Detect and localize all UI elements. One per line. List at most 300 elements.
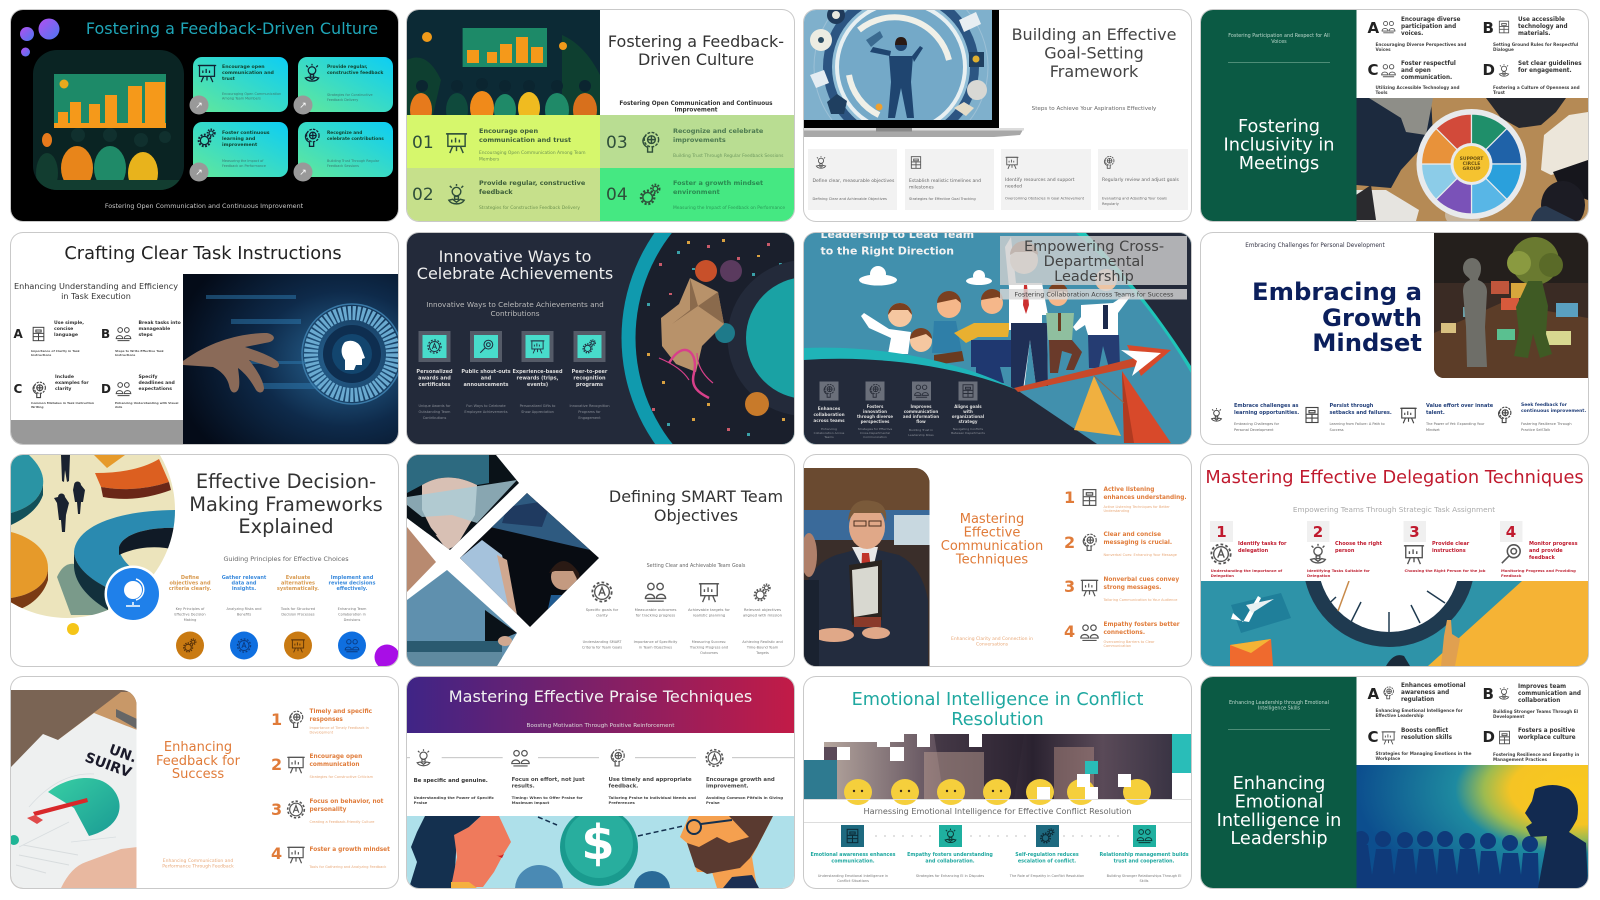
step 3 bbox=[1064, 577, 1179, 602]
box 3: Identify resources and support bbox=[1004, 177, 1074, 183]
column 2: Cross-Departmental bbox=[859, 430, 890, 434]
step 3: strong messages. bbox=[1103, 585, 1161, 591]
item A: Encouraging Diverse Perspectives and bbox=[1375, 42, 1466, 47]
column 4: Time-Bound Team bbox=[746, 646, 779, 650]
subtitle: Enhancing Communication and bbox=[162, 858, 233, 864]
header band bbox=[407, 677, 794, 733]
step 2: Choose the right bbox=[1334, 541, 1382, 547]
column 4: Relationship management builds bbox=[1099, 852, 1188, 858]
block 02: Provide regular, constructive bbox=[479, 179, 586, 187]
item C: examples for bbox=[54, 380, 89, 386]
step 4: and provide bbox=[1528, 548, 1563, 554]
item 1: Personal Development bbox=[1234, 428, 1274, 432]
subtitle: Setting Clear and Achievable Team Goals bbox=[647, 563, 746, 569]
column 4: Skills bbox=[1139, 879, 1148, 883]
column 1: certificates bbox=[419, 382, 450, 388]
gray title panel: Departmental bbox=[1043, 254, 1144, 270]
item A: Enhances emotional bbox=[1400, 683, 1465, 689]
item 2: Persist through bbox=[1329, 402, 1373, 408]
green side panel: Enhancing bbox=[1232, 774, 1325, 794]
panel: Enhancing Emotional Intelligence in Leadership bbox=[1200, 677, 1588, 888]
column 4: Aligns goals bbox=[954, 404, 982, 408]
card: foster continuous learning: Foster continuous bbox=[222, 130, 269, 136]
block 03: Recognize and celebrate bbox=[673, 127, 764, 135]
block 02: Strategies for Constructive Feedback Delivery bbox=[479, 205, 580, 211]
block 01: 01 bbox=[412, 133, 434, 153]
step 3: 3 bbox=[1064, 577, 1075, 596]
item C: C bbox=[13, 382, 22, 396]
card: encourage open communication: Encouraging Open Communication bbox=[222, 92, 281, 96]
step 2: Delegation bbox=[1306, 573, 1330, 578]
panel: Fostering a Feedback-Driven Culture (dark) bbox=[10, 10, 398, 221]
step 3: Creating a Feedback-Friendly Culture bbox=[309, 820, 374, 824]
title: Mastering Effective Delegation Techniques bbox=[1205, 467, 1583, 488]
column 4: Programs for bbox=[578, 410, 601, 414]
title: Mindset bbox=[1312, 328, 1422, 356]
step 4: Empathy fosters better bbox=[1103, 622, 1179, 628]
picture: statue and tree figure bbox=[1434, 232, 1588, 378]
header band: Boosting Motivation Through Positive Reinforcement bbox=[527, 723, 675, 729]
step 2: communication bbox=[309, 762, 359, 768]
item D bbox=[100, 374, 178, 408]
item 3: Tailoring Praise to Individual Needs and bbox=[608, 795, 696, 800]
green side panel: Intelligence in bbox=[1216, 811, 1341, 831]
column 1: across teams bbox=[813, 418, 845, 422]
title: Innovative Ways to bbox=[439, 246, 591, 266]
item D: Set clear guidelines bbox=[1518, 61, 1582, 67]
picture: abstract shapes with walking figures bbox=[11, 455, 175, 618]
item B: materials. bbox=[1518, 31, 1550, 37]
step 2: 2 bbox=[1312, 523, 1323, 541]
step 4: connections. bbox=[1103, 630, 1145, 636]
box 4: Regularly bbox=[1102, 202, 1119, 206]
panel: Fostering a Feedback-Driven Culture (numbered) bbox=[407, 10, 794, 221]
item A: A bbox=[13, 326, 23, 340]
card: recognize contributions: celebrate contributions bbox=[326, 136, 384, 142]
step 2: messaging is crucial. bbox=[1103, 540, 1172, 546]
dotted connectors bbox=[875, 835, 1118, 837]
column 1: Specific goals for bbox=[586, 607, 619, 612]
column 3 bbox=[1008, 825, 1084, 878]
column 1: Teams bbox=[823, 434, 834, 438]
timeline connectors bbox=[407, 757, 794, 758]
item C: Foster respectful bbox=[1400, 61, 1455, 67]
step 4: Communication bbox=[1103, 644, 1131, 648]
block 01 bbox=[407, 115, 600, 168]
item B: Development bbox=[1492, 714, 1524, 719]
green side panel: Fostering Participation and Respect for All bbox=[1228, 33, 1329, 39]
subtitle: Empowering Teams Through Strategic Task Assignment bbox=[1292, 505, 1495, 514]
column 3: Improves bbox=[910, 404, 932, 408]
step 1: Development bbox=[309, 730, 333, 734]
item 1 bbox=[414, 749, 495, 805]
item B: collaboration bbox=[1518, 698, 1560, 704]
column 1: Enhances bbox=[817, 406, 840, 410]
item C: communication. bbox=[1400, 75, 1452, 81]
item A: A bbox=[1367, 19, 1379, 37]
column 1: criteria clearly. bbox=[168, 586, 211, 592]
column 2: Empathy fosters understanding bbox=[907, 852, 993, 858]
step 4: Monitoring Progress and Providing bbox=[1500, 568, 1576, 573]
item A: Voices bbox=[1375, 47, 1391, 52]
column 1: collaboration bbox=[813, 412, 844, 416]
subtitle: Fostering Open Communication and Continuous bbox=[619, 101, 773, 107]
column 3 bbox=[276, 575, 319, 660]
step 3: Focus on behavior, not bbox=[309, 799, 383, 805]
box 1: Defining Clear and Achievable Objectives bbox=[812, 197, 887, 201]
step 4 bbox=[1064, 622, 1179, 648]
item B: Instructions bbox=[114, 352, 135, 356]
card: encourage open communication: Among Team Members bbox=[222, 96, 261, 100]
title: Mastering bbox=[959, 512, 1024, 527]
column 4: Navigating Conflicts bbox=[952, 426, 983, 430]
green side panel: Intelligence Skills bbox=[1257, 706, 1300, 712]
title: Resolution bbox=[951, 710, 1043, 730]
column 1: Personalized bbox=[416, 368, 453, 374]
item 3: The Power of Yet: Expanding Your bbox=[1424, 422, 1484, 426]
picture: two people and dollar coin: $ bbox=[581, 815, 615, 871]
card: provide regular feedback bbox=[293, 57, 392, 114]
card: recognize contributions: Building Trust Through Regular bbox=[326, 159, 379, 163]
item B: Break tasks into bbox=[138, 320, 180, 326]
column 4: with bbox=[963, 408, 973, 414]
step 2: 2 bbox=[270, 755, 282, 774]
panel: Mastering Effective Delegation Techniques bbox=[1200, 455, 1588, 666]
column 1: Collaboration Across bbox=[813, 430, 844, 434]
item C: Strategies for Managing Emotions in the bbox=[1375, 751, 1471, 756]
column 2: innovation bbox=[862, 408, 887, 414]
card: foster continuous learning: learning and bbox=[222, 136, 255, 142]
card: provide regular feedback: Strategies for Constructive bbox=[326, 93, 372, 97]
column 2: for tracking progress bbox=[636, 612, 675, 618]
card: encourage open communication: trust bbox=[222, 76, 235, 82]
item 1: Understanding the Power of Specific bbox=[414, 795, 495, 800]
step 3 bbox=[1403, 521, 1485, 573]
item 4: Encourage growth and bbox=[706, 777, 775, 783]
step 2 bbox=[1064, 532, 1176, 557]
item C: C bbox=[1367, 728, 1378, 746]
box 1: Define clear, measurable objectives bbox=[812, 178, 894, 184]
column 4: aligned with mission bbox=[743, 612, 783, 618]
item B: Building Stronger Teams Through EI bbox=[1492, 709, 1578, 714]
item D: Fostering a Culture of Openness and bbox=[1492, 85, 1579, 90]
step 1 bbox=[1210, 521, 1287, 578]
column 2 bbox=[221, 575, 266, 660]
banner subtitle: Harnessing Emotional Intelligence for Effective Conflict Resolution bbox=[863, 806, 1131, 816]
subtitle: Embracing Challenges for Personal Development bbox=[1245, 242, 1385, 248]
column 4: Innovative Recognition bbox=[569, 404, 610, 408]
item D: Fosters a positive bbox=[1518, 728, 1575, 734]
step 1: Understanding the Importance of bbox=[1210, 568, 1282, 573]
panel: Crafting Clear Task Instructions bbox=[10, 232, 398, 444]
box 2: Strategies for Effective Goal Tracking bbox=[908, 197, 975, 201]
step 1: responses bbox=[309, 717, 343, 723]
title: Feedback for bbox=[156, 754, 240, 769]
block 02: 02 bbox=[412, 185, 434, 205]
card: recognize contributions: Recognize and bbox=[326, 130, 362, 136]
column 4: strategy bbox=[958, 418, 977, 424]
picture: survey sheet and pencil bbox=[8, 690, 138, 888]
item D: Aids bbox=[114, 404, 122, 408]
column 2: and collaboration. bbox=[925, 858, 974, 864]
item D: deadlines and bbox=[138, 380, 174, 386]
item 2 bbox=[1306, 402, 1391, 432]
item 2 bbox=[512, 750, 585, 805]
picture: diamond photo mosaic bbox=[407, 455, 599, 666]
item B bbox=[1482, 17, 1578, 52]
subtitle: in Task Execution bbox=[61, 290, 130, 300]
column 3: Show Appreciation bbox=[521, 410, 554, 414]
title: Crafting Clear Task Instructions bbox=[64, 242, 341, 264]
box 2: Establish realistic timelines and bbox=[908, 178, 981, 184]
green side panel bbox=[1200, 10, 1356, 221]
gray title panel: Leadership bbox=[1054, 268, 1133, 284]
item 3: Preferences bbox=[608, 800, 636, 805]
column 2: Fosters bbox=[866, 404, 883, 408]
item 3: talent. bbox=[1426, 410, 1444, 416]
subtitle: Contributions bbox=[490, 308, 540, 318]
picture: team riding an arrow: to the Right Direction bbox=[820, 244, 953, 257]
column 1: Key Principles of bbox=[175, 607, 205, 611]
green side panel: Fostering bbox=[1237, 117, 1320, 137]
block 02: feedback bbox=[479, 188, 513, 196]
step 3 bbox=[270, 799, 383, 824]
item D: expectations bbox=[138, 386, 172, 392]
item B bbox=[1482, 684, 1580, 719]
panel: Mastering Effective Communication Techniques bbox=[804, 455, 1190, 666]
column 2: Benefits bbox=[236, 612, 251, 616]
item B: steps bbox=[138, 332, 152, 338]
block 04 bbox=[600, 168, 794, 221]
step 1 bbox=[1064, 487, 1186, 513]
item C: resolution skills bbox=[1400, 735, 1452, 741]
card: provide regular feedback: Feedback Delivery bbox=[326, 98, 358, 102]
card: recognize contributions bbox=[293, 122, 392, 182]
column 4 bbox=[951, 381, 985, 434]
subtitle: Steps to Achieve Your Aspirations Effectively bbox=[1031, 106, 1157, 112]
block 03 bbox=[600, 115, 794, 168]
box 2 bbox=[904, 149, 994, 210]
column 3: flow bbox=[916, 418, 926, 424]
title: Success bbox=[171, 767, 224, 782]
step 4: feedback bbox=[1528, 555, 1555, 561]
item B: communication and bbox=[1518, 691, 1580, 697]
column 2: Strategies for Enhancing EI in Disputes bbox=[915, 874, 984, 878]
step 2: 2 bbox=[1064, 533, 1075, 552]
title: Fostering a Feedback- bbox=[608, 32, 784, 51]
column 4: Between Departments bbox=[951, 430, 985, 434]
panel: Building an Effective Goal-Setting Framework bbox=[804, 10, 1190, 221]
item 4: Praise bbox=[706, 800, 720, 805]
column 3 bbox=[512, 330, 563, 414]
subtitle: Conversations bbox=[975, 642, 1008, 648]
panel: Embracing a Growth Mindset bbox=[1200, 232, 1588, 444]
item A: Effective Leadership bbox=[1375, 713, 1423, 718]
item 4: improvement. bbox=[706, 784, 749, 790]
column 4: programs bbox=[576, 382, 603, 388]
column 1: communication. bbox=[831, 858, 874, 864]
item B: B bbox=[100, 326, 110, 340]
item 3 bbox=[1400, 402, 1493, 432]
item C: and open bbox=[1400, 68, 1430, 74]
item 1: learning opportunities. bbox=[1234, 410, 1299, 416]
column 2: Measurable outcomes bbox=[635, 607, 676, 612]
column 2 bbox=[634, 583, 677, 650]
subtitle: Fostering Open Communication and Continuous Improvement bbox=[104, 202, 303, 210]
item 1: Praise bbox=[414, 800, 428, 805]
item D: D bbox=[1482, 728, 1494, 746]
step 2 bbox=[1306, 521, 1382, 578]
column 4 bbox=[1099, 825, 1188, 883]
column 1 bbox=[168, 575, 211, 660]
item 3: Mindset bbox=[1426, 428, 1440, 432]
item 2: Timing: When to Offer Praise for bbox=[512, 795, 583, 800]
item D: workplace culture bbox=[1518, 735, 1575, 741]
item B: B bbox=[1482, 19, 1493, 37]
step 2: Identifying Tasks Suitable for bbox=[1306, 568, 1370, 573]
column 2: Public shout-outs bbox=[461, 368, 511, 374]
column 4 bbox=[569, 330, 610, 420]
item 1: Embrace challenges as bbox=[1234, 402, 1298, 408]
column 4 bbox=[328, 575, 375, 660]
step 4 bbox=[1500, 521, 1577, 578]
item A: voices. bbox=[1400, 31, 1423, 37]
panel: Mastering Effective Praise Techniques bbox=[407, 677, 794, 888]
title: Communication bbox=[940, 539, 1043, 554]
step 2 bbox=[270, 754, 373, 779]
column 4: effectively. bbox=[336, 586, 367, 592]
item D: D bbox=[1482, 61, 1494, 79]
item A: Enhancing Emotional Intelligence for bbox=[1375, 708, 1463, 713]
item C: C bbox=[1367, 61, 1378, 79]
column 1: clarity bbox=[596, 612, 609, 618]
step 3: 3 bbox=[270, 800, 282, 819]
panel: Effective Decision-Making Frameworks Explained bbox=[10, 455, 398, 666]
step 4: Feedback bbox=[1500, 573, 1521, 578]
picture: meeting circle with wheel bbox=[1356, 98, 1588, 229]
step 1: 1 bbox=[1216, 523, 1226, 541]
gray title panel: Empowering Cross- bbox=[1023, 238, 1164, 254]
green side panel: Enhancing Leadership through Emotional bbox=[1228, 700, 1328, 706]
picture: gift bag and confetti bbox=[622, 154, 990, 522]
title: Framework bbox=[1049, 62, 1139, 81]
column 3: rewards (trips, bbox=[517, 375, 559, 381]
step 1: Identify tasks for bbox=[1238, 541, 1287, 547]
panel: Empowering Cross-Departmental Leadership bbox=[804, 232, 1190, 444]
picture: hand touching AI dial bbox=[182, 274, 402, 444]
item D bbox=[1482, 728, 1579, 762]
column 3: Achievable targets for bbox=[688, 607, 730, 612]
item A: Encourage diverse bbox=[1400, 17, 1460, 23]
item C: Include bbox=[54, 374, 73, 380]
card: encourage open communication: communication and bbox=[222, 70, 273, 76]
item A: concise bbox=[54, 326, 73, 332]
column 4: review decisions bbox=[328, 580, 375, 586]
box 3: Overcoming Obstacles in Goal Achievement bbox=[1004, 196, 1084, 200]
step 3: Tailoring Communication to Your Audience bbox=[1102, 598, 1177, 602]
column 1: awards and bbox=[418, 375, 451, 381]
picture: audience watching a bar chart bbox=[32, 50, 184, 194]
column 3: Tools for Structured bbox=[279, 607, 315, 611]
subtitle panel: Fostering Collaboration Across Teams for Success bbox=[1014, 290, 1174, 298]
step 1: Importance of Timely Feedback in bbox=[309, 726, 368, 730]
column 4: Implement and bbox=[330, 575, 373, 581]
column 1: Define bbox=[180, 575, 199, 581]
item C: Writing bbox=[30, 404, 43, 408]
block 01: Encouraging Open Communication Among Team bbox=[479, 150, 586, 156]
title: Emotional Intelligence in Conflict bbox=[851, 690, 1143, 710]
item B: Dialogue bbox=[1492, 47, 1514, 52]
item A: participation and bbox=[1400, 24, 1456, 30]
item B: technology and bbox=[1518, 24, 1567, 30]
block 04: 04 bbox=[606, 185, 628, 205]
green side panel: Meetings bbox=[1238, 154, 1319, 174]
column 1 bbox=[582, 582, 622, 650]
step 3: instructions bbox=[1432, 548, 1465, 554]
step 4: Monitor progress bbox=[1528, 541, 1577, 547]
step 1: 1 bbox=[270, 710, 282, 729]
step 2: Clear and concise bbox=[1103, 532, 1161, 538]
column 3: Leadership Roles bbox=[908, 432, 934, 436]
decorative circles bbox=[20, 18, 59, 56]
item 4: continuous improvement. bbox=[1520, 408, 1586, 414]
decorative dots bbox=[66, 623, 399, 670]
column 1: Unique Awards for bbox=[418, 404, 451, 408]
column 2: Analyzing Risks and bbox=[226, 607, 261, 611]
column 1 bbox=[813, 381, 845, 438]
item 4: Seek feedback for bbox=[1520, 402, 1567, 408]
block 04: environment bbox=[673, 188, 720, 196]
column 2: in Team Objectives bbox=[639, 646, 672, 650]
step 1: 1 bbox=[1064, 488, 1075, 507]
item A bbox=[1367, 683, 1465, 718]
column 2: Fun Ways to Celebrate bbox=[466, 404, 506, 408]
item D: Fostering Resilience and Empathy in bbox=[1492, 752, 1579, 757]
item B bbox=[100, 320, 180, 356]
item 1: Be specific and genuine. bbox=[414, 778, 488, 784]
column 3: Measuring Success: bbox=[692, 640, 726, 644]
item C: Boosts conflict bbox=[1400, 728, 1448, 734]
subtitle: Improvement bbox=[675, 108, 718, 114]
item B: Setting Ground Rules for Respectful bbox=[1492, 42, 1578, 47]
item 4: Practice Self-Talk bbox=[1520, 428, 1551, 432]
column 4: Decisions bbox=[343, 618, 360, 622]
column 3: events) bbox=[527, 382, 548, 388]
item 2: Learning from Failure: A Path to bbox=[1329, 422, 1384, 426]
box 1 bbox=[808, 149, 896, 210]
step 3: Provide clear bbox=[1432, 541, 1469, 547]
column 3: The Role of Empathy in Conflict Resolution bbox=[1008, 874, 1084, 878]
step 4: 4 bbox=[1064, 622, 1075, 641]
column 4: trust and cooperation. bbox=[1113, 858, 1174, 864]
item B: Use accessible bbox=[1518, 17, 1565, 23]
item C bbox=[13, 374, 94, 408]
title: Making Frameworks bbox=[189, 493, 382, 516]
block 01: Encourage open bbox=[479, 127, 538, 135]
title: Explained bbox=[238, 515, 333, 538]
column 2: Gather relevant bbox=[221, 575, 266, 581]
step 1: delegation bbox=[1238, 548, 1268, 554]
item B: B bbox=[1482, 685, 1493, 703]
item C: Workplace bbox=[1375, 756, 1400, 761]
column 2: Employee Achievements bbox=[464, 410, 508, 414]
column 4: Collaboration in bbox=[338, 612, 365, 616]
item C: Tools bbox=[1375, 90, 1387, 95]
step 3: 3 bbox=[1409, 523, 1419, 541]
column 1: Emotional awareness enhances bbox=[810, 852, 895, 858]
column 4: Achieving Realistic and bbox=[742, 640, 783, 644]
column 2: Importance of Specificity bbox=[634, 640, 677, 644]
